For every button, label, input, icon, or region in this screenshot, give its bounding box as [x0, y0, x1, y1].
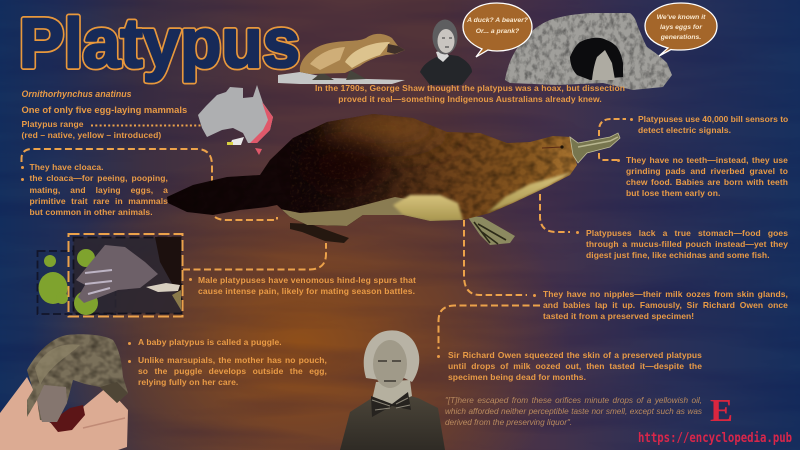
range legend: Platypus range — [22, 119, 84, 129]
connector: cloaca — [22, 149, 277, 220]
text: no teeth: They have no teeth—instead, they use — [626, 154, 788, 164]
text: no teeth: grinding pads and riverbed gravel to — [626, 166, 788, 176]
bubble text: known it: We've known it — [657, 14, 705, 21]
bullet — [21, 166, 24, 169]
subtitle: One of only five egg-laying mammals — [22, 104, 187, 115]
species name: Ornithorhynchus anatinus — [22, 89, 131, 99]
speech bubble: a prank — [463, 3, 532, 57]
bullet dot: puggle — [128, 342, 131, 344]
spur photo background — [74, 238, 182, 314]
range legend: (red – native, yellow – introduced) — [22, 130, 161, 140]
bubble text: known it: generations. — [661, 34, 701, 41]
quote: derived from the preserving liquor". — [445, 418, 572, 427]
connector: bill sensors — [599, 119, 626, 136]
speech bubble: known it — [645, 3, 717, 56]
text: spurs: Male platypuses have venomous hind-leg spurs that — [198, 274, 416, 284]
lily pads — [38, 249, 98, 315]
bullet dot: spurs — [188, 278, 192, 281]
connector: Owen — [438, 306, 540, 349]
spur photo dashed frame — [68, 234, 182, 316]
bubble text: prank — [467, 17, 528, 35]
connector: no teeth — [599, 153, 618, 160]
map of Australia — [198, 85, 273, 155]
bullet dot: sensors — [630, 118, 633, 120]
text: no teeth: chew food. Babies are born with teeth — [626, 177, 788, 187]
quote: "[T]here escaped from these orifices minute drops of a yellowish oil, — [445, 396, 702, 404]
title: Platypus — [19, 4, 300, 82]
small platypus illustration — [278, 34, 405, 84]
range legend — [22, 119, 161, 140]
puggle in hand photo — [0, 334, 128, 450]
text: stomach: through a mucus-filled pouch instead—yet they — [586, 239, 788, 249]
text: nipples: They have no nipples—their milk oozes from skin glands, — [543, 288, 788, 298]
connector: range dotted line — [91, 124, 202, 126]
cloaca lines: the cloaca—for peeing, pooping, — [30, 173, 168, 183]
text: Shaw hoax: proved it real—something Indigenous Australians already knew. — [338, 94, 602, 104]
text: Shaw hoax: In the 1790s, George Shaw thought the platypus was a hoax, but dissection — [315, 83, 625, 93]
quote — [445, 396, 702, 427]
cloaca lines: They have cloaca. — [30, 162, 104, 172]
main platypus illustration — [167, 110, 620, 245]
text: Owen: until drops of milk oozed out, then tasted it—despite the — [448, 361, 702, 371]
bubble text: prank: Or... a prank? — [476, 28, 519, 35]
bubble text: prank: A duck? A beaver? — [467, 17, 528, 24]
bullet dot: nipples — [533, 294, 536, 296]
portrait: George Shaw — [420, 20, 472, 85]
connector: venomous spurs — [183, 243, 326, 270]
burrow illustration — [505, 13, 672, 90]
text: Shaw hoax — [315, 83, 625, 104]
bubble text: known it: lays eggs for — [660, 24, 702, 31]
title: Platypus — [19, 4, 300, 82]
Encyclopedia logo E: E — [710, 392, 733, 428]
bullet dot: pouch — [128, 360, 131, 362]
text: no pouch: so the puggle develops outside the egg, — [138, 366, 327, 376]
text: no teeth: but lose them early on. — [626, 188, 720, 198]
text: nipples: and babies lap it up. Famously, Sir Richard Owen once — [543, 300, 788, 310]
cloaca lines: primitive trait rare in mammals — [30, 196, 168, 206]
text: no pouch: Unlike marsupials, the mother has no pouch, — [138, 354, 327, 364]
text: stomach: Platypuses lack a true stomach—food goes — [586, 228, 788, 238]
bullet dot: Owen — [437, 354, 440, 358]
text: stomach — [586, 228, 788, 260]
text: stomach: digest just fine, like echidnas and some fish. — [586, 250, 770, 260]
black dashed box — [38, 251, 116, 314]
source url: https://encyclopedia.pub — [638, 430, 792, 446]
bullet dot: teeth — [617, 158, 620, 162]
bullet dot: stomach — [576, 231, 579, 234]
text: puggle name: A baby platypus is called a puggle. — [138, 336, 282, 346]
spur photo: foot — [76, 237, 181, 310]
cloaca lines: mating, and laying eggs, a — [30, 185, 168, 195]
quote: which afforded neither perceptible taste nor smell, except such as was — [445, 407, 702, 416]
text: Owen: Sir Richard Owen squeezed the skin of a preserved platypus — [448, 350, 702, 360]
text: bill sensors: detect electric signals. — [638, 125, 731, 135]
portrait: Richard Owen — [340, 330, 445, 450]
text: spurs — [198, 274, 416, 296]
text: Owen — [448, 350, 702, 382]
cloaca lines: but common in other animals. — [30, 207, 153, 217]
connector: stomach — [540, 194, 570, 232]
text: no teeth — [626, 154, 788, 198]
text: no pouch — [138, 354, 327, 387]
text: spurs: cause intense pain, likely for mating season battles. — [198, 286, 415, 296]
text: nipples — [543, 288, 788, 321]
text: bill sensors — [638, 114, 788, 135]
text: cloaca — [21, 162, 168, 217]
text: nipples: tasted it from a preserved specimen! — [543, 311, 694, 321]
text: bill sensors: Platypuses use 40,000 bill sensors to — [638, 114, 788, 124]
connector: nipples — [464, 220, 527, 295]
text: no pouch: relying fully on her care. — [138, 377, 238, 387]
bubble text: known it — [657, 14, 706, 41]
text: Owen: specimen being dead for months. — [448, 372, 586, 382]
cloaca lines — [30, 162, 168, 217]
